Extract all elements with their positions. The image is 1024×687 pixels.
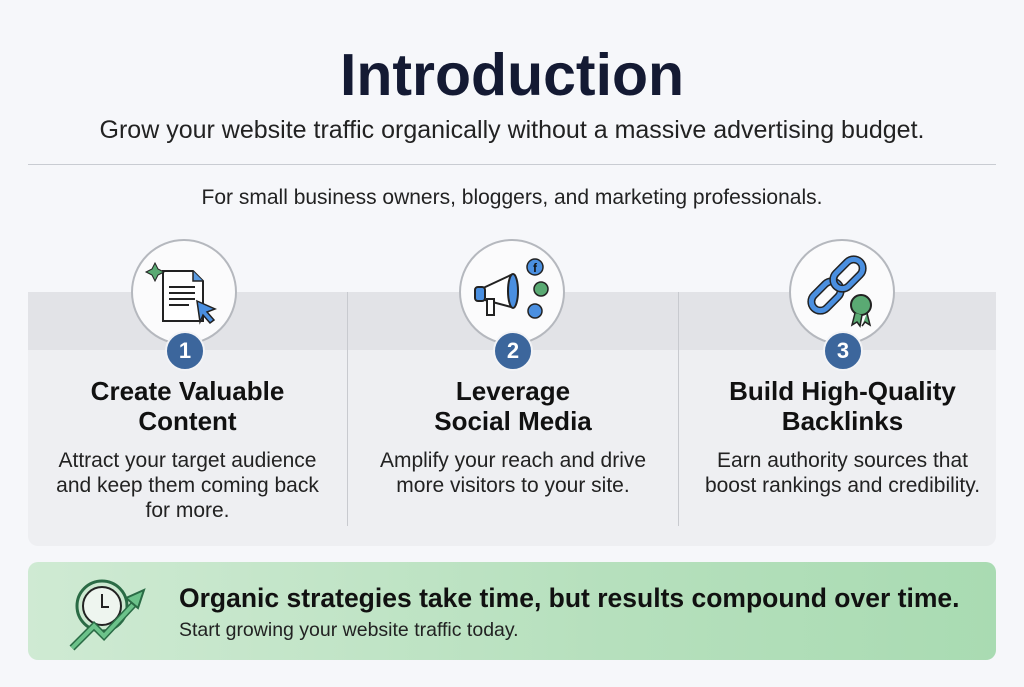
column 1 text xyxy=(56,376,319,522)
icon: clock with arrow xyxy=(70,580,146,650)
column 1 text: Content xyxy=(138,406,237,436)
column 3 text: Backlinks xyxy=(782,406,903,436)
audience text: For small business owners, bloggers, and marketing professionals. xyxy=(202,186,822,209)
badge 1: 1 xyxy=(179,338,191,363)
column 2 text: more visitors to your site. xyxy=(396,474,630,497)
column 1 text: Attract your target audience xyxy=(58,449,316,472)
callout: green banner xyxy=(28,562,996,660)
column 2 text: Amplify your reach and drive xyxy=(380,449,646,472)
column 1 text: and keep them coming back xyxy=(56,474,319,497)
badge 1 xyxy=(165,331,205,371)
title: Introduction xyxy=(340,42,684,108)
column 3 text xyxy=(705,376,980,497)
badge 3: 3 xyxy=(837,338,849,363)
subtitle: Grow your website traffic organically without a massive advertising budget. xyxy=(100,116,924,144)
column 2 text: Leverage xyxy=(456,376,570,406)
icon: megaphone: f xyxy=(533,261,538,275)
column 1 text: for more. xyxy=(145,499,230,522)
badge 2 xyxy=(493,331,533,371)
icon: chain link with award xyxy=(789,239,895,345)
badge 2: 2 xyxy=(507,338,519,363)
callout heading: Organic strategies take time, but results compound over time. xyxy=(179,583,959,613)
column 3 text: Earn authority sources that xyxy=(717,449,968,472)
icon: megaphone xyxy=(459,239,565,345)
badge 3 xyxy=(823,331,863,371)
column 3 text: Build High-Quality xyxy=(729,376,956,406)
column 3 text: boost rankings and credibility. xyxy=(705,474,980,497)
column 1 text: Create Valuable xyxy=(91,376,284,406)
callout subtext: Start growing your website traffic today. xyxy=(179,619,519,641)
column 2 text: Social Media xyxy=(434,406,592,436)
panel: strategies xyxy=(28,292,996,546)
icon: content document xyxy=(131,239,237,345)
column 2 text xyxy=(380,376,646,497)
